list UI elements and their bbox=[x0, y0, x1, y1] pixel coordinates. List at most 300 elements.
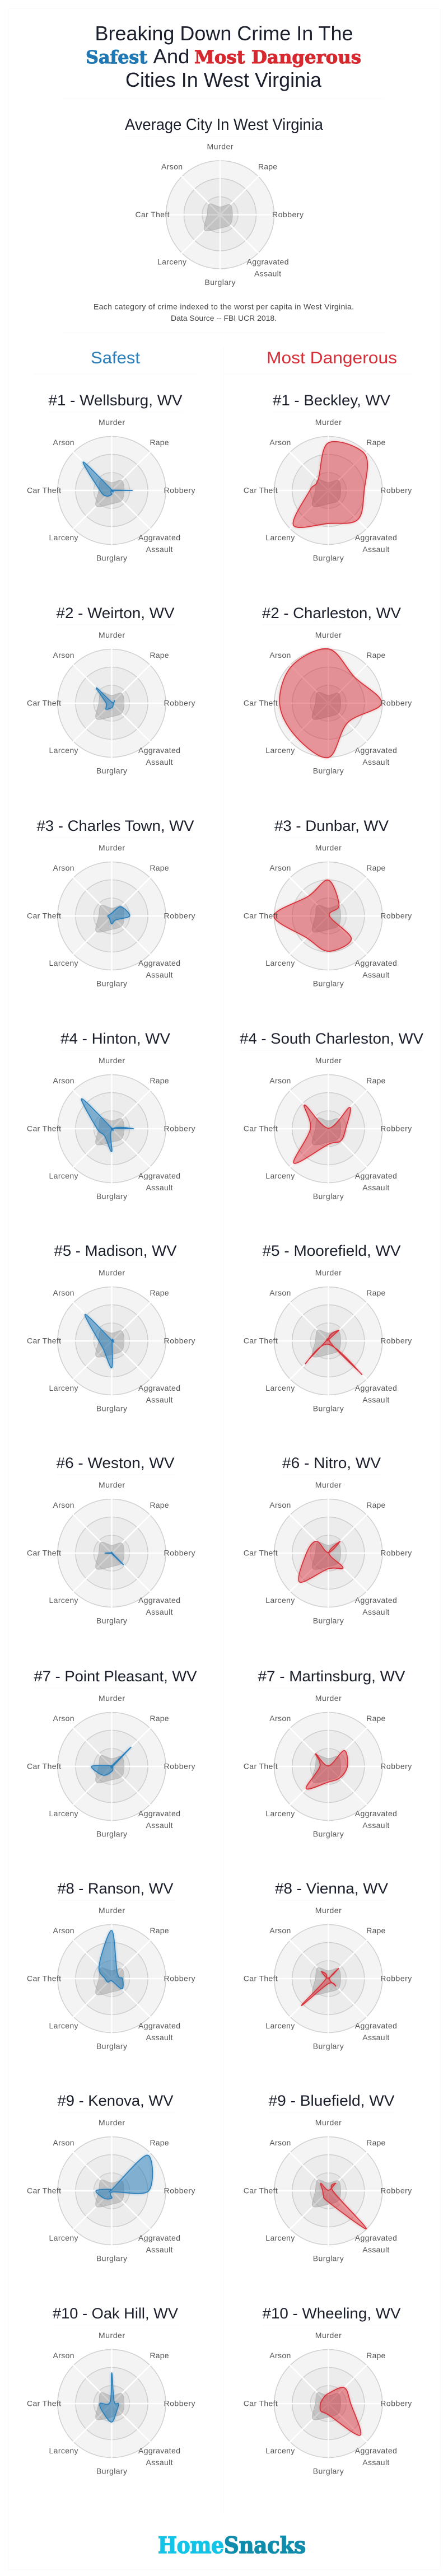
data shape bbox=[274, 880, 351, 951]
axis labels: Rape bbox=[150, 2138, 169, 2147]
heading: average city: Average City In West Virginia bbox=[125, 116, 324, 134]
axis labels: Arson bbox=[53, 863, 74, 872]
radar chart: Nitro bbox=[244, 1480, 412, 1625]
axis labels bbox=[244, 2331, 412, 2476]
axis labels: Rape bbox=[150, 863, 169, 872]
axis labels: Murder bbox=[315, 1480, 342, 1489]
axis labels: Car Theft bbox=[27, 1761, 61, 1770]
radar chart: Charleston bbox=[244, 630, 412, 775]
axis labels: Burglary bbox=[96, 1616, 127, 1625]
data shape bbox=[298, 1541, 343, 1582]
axis labels: Arson bbox=[53, 651, 74, 660]
axis labels: Assault bbox=[362, 1607, 389, 1616]
axis labels: Burglary bbox=[313, 2254, 344, 2263]
axis labels: Robbery bbox=[164, 1336, 195, 1345]
axis labels: Robbery bbox=[380, 1974, 412, 1983]
axis labels: Aggravated bbox=[355, 2021, 397, 2030]
axis labels: Aggravated bbox=[355, 746, 397, 755]
axis labels: Car Theft bbox=[244, 1761, 278, 1770]
axis labels: Larceny bbox=[49, 1596, 78, 1605]
data shape bbox=[279, 649, 381, 758]
axis labels: Car Theft bbox=[244, 699, 278, 708]
axis labels: Murder bbox=[315, 418, 342, 427]
radar grid bbox=[58, 1074, 167, 1184]
radar chart: Hinton bbox=[27, 1056, 195, 1200]
axis labels: Aggravated bbox=[138, 746, 180, 755]
axis labels: Robbery bbox=[380, 2399, 412, 2407]
axis labels: Arson bbox=[269, 2351, 291, 2360]
axis labels: Assault bbox=[362, 2458, 389, 2467]
heading: #4 South Charleston: #4 - South Charleston, WV bbox=[240, 1030, 423, 1047]
axis labels: Burglary bbox=[313, 979, 344, 988]
axis labels: Assault bbox=[362, 758, 389, 766]
axis labels bbox=[27, 1906, 195, 2050]
axis labels: Burglary bbox=[96, 2254, 127, 2263]
axis labels: Aggravated bbox=[246, 258, 289, 267]
axis labels: Murder bbox=[207, 142, 234, 151]
axis labels: Robbery bbox=[164, 699, 195, 708]
data shape bbox=[99, 1930, 123, 1989]
axis labels: Larceny bbox=[265, 1383, 295, 1392]
radar grid bbox=[274, 1924, 383, 2033]
axis labels: Aggravated bbox=[355, 533, 397, 542]
data shape bbox=[91, 1747, 131, 1775]
axis labels bbox=[27, 1056, 195, 1200]
axis labels: Murder bbox=[99, 418, 125, 427]
axis labels: Burglary bbox=[96, 2041, 127, 2050]
axis labels: Larceny bbox=[265, 1596, 295, 1605]
axis labels: Assault bbox=[362, 545, 389, 554]
axis labels: Assault bbox=[146, 1395, 173, 1404]
axis labels: Larceny bbox=[49, 2233, 78, 2242]
data shape bbox=[293, 1105, 351, 1163]
axis labels: Robbery bbox=[164, 1974, 195, 1983]
axis labels: Aggravated bbox=[138, 959, 180, 967]
heading: #10 Oak Hill: #10 - Oak Hill, WV bbox=[53, 2305, 178, 2322]
radar grid bbox=[58, 648, 167, 758]
axis labels: Arson bbox=[53, 1714, 74, 1723]
axis labels: Car Theft bbox=[244, 486, 278, 495]
axis labels: Murder bbox=[99, 630, 125, 639]
axis labels: Robbery bbox=[380, 1549, 412, 1558]
axis labels: Car Theft bbox=[27, 2399, 61, 2407]
axis labels: Arson bbox=[269, 1500, 291, 1509]
axis labels bbox=[27, 2118, 195, 2263]
radar chart: Charles Town bbox=[27, 843, 195, 988]
heading: #2 Charleston: #2 - Charleston, WV bbox=[262, 605, 401, 621]
axis labels: Aggravated bbox=[355, 1596, 397, 1605]
axis labels: Larceny bbox=[49, 1171, 78, 1180]
axis labels: Aggravated bbox=[355, 1171, 397, 1180]
axis labels bbox=[244, 843, 412, 988]
axis labels bbox=[27, 843, 195, 988]
data shape bbox=[306, 1751, 348, 1789]
radar chart: Dunbar bbox=[244, 843, 412, 988]
axis labels: Assault bbox=[362, 970, 389, 979]
axis labels: Robbery bbox=[164, 911, 195, 920]
axis labels: Murder bbox=[99, 1480, 125, 1489]
axis labels bbox=[244, 1694, 412, 1839]
radar grid bbox=[274, 2349, 383, 2458]
axis labels: Robbery bbox=[380, 1124, 412, 1133]
axis labels: Robbery bbox=[380, 911, 412, 920]
radar chart: Ranson bbox=[27, 1906, 195, 2050]
axis labels: Rape bbox=[366, 1714, 386, 1723]
title: And bbox=[153, 45, 189, 68]
radar grid bbox=[58, 1498, 167, 1608]
axis labels: Murder bbox=[99, 843, 125, 852]
axis labels: Robbery bbox=[164, 1761, 195, 1770]
axis labels: Burglary bbox=[313, 1830, 344, 1839]
axis labels: Arson bbox=[53, 2138, 74, 2147]
axis labels: Car Theft bbox=[27, 2186, 61, 2195]
radar grid bbox=[274, 1286, 383, 1396]
axis labels: Murder bbox=[99, 1268, 125, 1277]
axis labels: Assault bbox=[146, 545, 173, 554]
axis labels: Assault bbox=[254, 269, 281, 278]
axis labels: Assault bbox=[146, 2245, 173, 2254]
heading: #3 Charles Town: #3 - Charles Town, WV bbox=[37, 817, 194, 834]
radar grid bbox=[274, 436, 383, 545]
axis labels: Rape bbox=[366, 1500, 386, 1509]
axis labels: Murder bbox=[315, 843, 342, 852]
heading: #4 Hinton: #4 - Hinton, WV bbox=[60, 1030, 170, 1047]
data shape bbox=[96, 2155, 152, 2199]
axis labels: Arson bbox=[269, 1714, 291, 1723]
heading: #8 Vienna: #8 - Vienna, WV bbox=[275, 1880, 388, 1897]
axis labels: Arson bbox=[161, 162, 183, 171]
radar chart: South Charleston bbox=[244, 1056, 412, 1200]
axis labels: Murder bbox=[315, 2118, 342, 2127]
axis labels: Rape bbox=[366, 1926, 386, 1935]
axis labels bbox=[27, 2331, 195, 2476]
radar grid bbox=[274, 1712, 383, 1821]
axis labels bbox=[27, 1694, 195, 1839]
axis labels bbox=[244, 1056, 412, 1200]
heading: #9 Kenova: #9 - Kenova, WV bbox=[57, 2092, 174, 2109]
radar chart: Point Pleasant bbox=[27, 1694, 195, 1839]
axis labels bbox=[27, 630, 195, 775]
logo: HomeSnacks bbox=[158, 2532, 306, 2559]
axis labels: Aggravated bbox=[355, 959, 397, 967]
axis labels: Murder bbox=[315, 1694, 342, 1703]
title: Breaking Down Crime In The bbox=[95, 22, 353, 45]
radar chart: Wellsburg bbox=[27, 418, 195, 562]
axis labels: Aggravated bbox=[138, 2021, 180, 2030]
logo: HomeSnacks: Home bbox=[158, 2532, 224, 2559]
radar grid bbox=[58, 861, 167, 971]
axis labels: Burglary bbox=[313, 1191, 344, 1200]
heading: #8 Ranson: #8 - Ranson, WV bbox=[57, 1880, 174, 1897]
radar grid with average shape bbox=[166, 160, 275, 270]
axis labels: Aggravated bbox=[138, 2233, 180, 2242]
axis labels: Murder bbox=[99, 2118, 125, 2127]
axis labels: Larceny bbox=[49, 2021, 78, 2030]
axis labels: Arson bbox=[269, 1076, 291, 1085]
radar grid bbox=[58, 1712, 167, 1821]
axis labels: Aggravated bbox=[355, 1383, 397, 1392]
radar chart: Beckley bbox=[244, 418, 412, 562]
axis labels: Assault bbox=[146, 1183, 173, 1192]
axis labels: Arson bbox=[269, 651, 291, 660]
axis labels: Larceny bbox=[265, 2021, 295, 2030]
axis labels: Murder bbox=[99, 1906, 125, 1915]
axis labels: Robbery bbox=[164, 1124, 195, 1133]
axis labels: Car Theft bbox=[27, 1336, 61, 1345]
axis labels: Car Theft bbox=[244, 1336, 278, 1345]
data shape bbox=[105, 1552, 124, 1565]
data shape bbox=[85, 1315, 114, 1368]
axis labels: Larceny bbox=[49, 746, 78, 755]
axis labels: Car Theft bbox=[136, 210, 170, 219]
axis labels: Rape bbox=[150, 651, 169, 660]
axis labels bbox=[244, 1268, 412, 1413]
axis labels: Rape bbox=[366, 651, 386, 660]
title: Safest bbox=[86, 46, 147, 68]
axis labels: Larceny bbox=[265, 746, 295, 755]
radar grid bbox=[58, 1286, 167, 1396]
axis labels: Aggravated bbox=[355, 1809, 397, 1818]
axis labels: Rape bbox=[258, 162, 277, 171]
axis labels: Aggravated bbox=[138, 1171, 180, 1180]
axis labels: Robbery bbox=[272, 210, 304, 219]
axis labels: Aggravated bbox=[355, 2233, 397, 2242]
axis labels: Larceny bbox=[49, 959, 78, 967]
heading: #5 Madison: #5 - Madison, WV bbox=[54, 1242, 177, 1259]
radar grid bbox=[58, 2349, 167, 2458]
axis labels: Burglary bbox=[96, 1404, 127, 1413]
axis labels: Arson bbox=[53, 1288, 74, 1297]
axis labels: Larceny bbox=[49, 1383, 78, 1392]
heading: #6 Nitro: #6 - Nitro, WV bbox=[282, 1455, 381, 1471]
axis labels: Car Theft bbox=[27, 486, 61, 495]
axis labels: Car Theft bbox=[244, 2399, 278, 2407]
axis labels bbox=[244, 2118, 412, 2263]
axis labels: Arson bbox=[53, 1500, 74, 1509]
radar chart: Weston bbox=[27, 1480, 195, 1625]
radar grid bbox=[58, 1924, 167, 2033]
axis labels: Car Theft bbox=[244, 1549, 278, 1558]
axis labels: Larceny bbox=[265, 533, 295, 542]
axis labels: Burglary bbox=[313, 2467, 344, 2476]
axis labels: Larceny bbox=[49, 533, 78, 542]
axis labels: Rape bbox=[150, 2351, 169, 2360]
axis labels bbox=[27, 1480, 195, 1625]
axis labels: Burglary bbox=[313, 1404, 344, 1413]
axis labels: Car Theft bbox=[27, 699, 61, 708]
axis labels: Assault bbox=[146, 1607, 173, 1616]
radar chart: Oak Hill bbox=[27, 2331, 195, 2476]
data shape bbox=[321, 2184, 366, 2229]
axis labels: Car Theft bbox=[27, 1124, 61, 1133]
axis labels bbox=[27, 418, 195, 562]
heading: #3 Dunbar: #3 - Dunbar, WV bbox=[274, 817, 389, 834]
data shape bbox=[83, 462, 132, 496]
axis labels: Burglary bbox=[313, 2041, 344, 2050]
radar chart: Vienna bbox=[244, 1906, 412, 2050]
axis labels: Car Theft bbox=[244, 2186, 278, 2195]
axis labels: Murder bbox=[315, 2331, 342, 2340]
axis labels: Murder bbox=[99, 2331, 125, 2340]
axis labels: Burglary bbox=[313, 1616, 344, 1625]
axis labels: Larceny bbox=[265, 959, 295, 967]
note: data source: Each category of crime indexed to the worst per capita in West Virginia. bbox=[94, 302, 354, 311]
axis labels: Rape bbox=[150, 438, 169, 447]
axis labels: Aggravated bbox=[138, 533, 180, 542]
axis labels: Aggravated bbox=[138, 2446, 180, 2455]
heading: #1 Beckley: #1 - Beckley, WV bbox=[273, 392, 390, 409]
axis labels: Rape bbox=[150, 1288, 169, 1297]
axis labels: Rape bbox=[366, 2138, 386, 2147]
axis labels: Robbery bbox=[164, 486, 195, 495]
axis labels: Aggravated bbox=[355, 2446, 397, 2455]
axis labels bbox=[27, 1268, 195, 1413]
axis labels: Arson bbox=[269, 438, 291, 447]
axis labels: Arson bbox=[53, 1926, 74, 1935]
axis labels: Larceny bbox=[265, 2446, 295, 2455]
data shape bbox=[320, 2387, 361, 2435]
axis labels: Arson bbox=[53, 2351, 74, 2360]
radar chart: Weirton bbox=[27, 630, 195, 775]
radar chart: Kenova bbox=[27, 2118, 195, 2263]
axis labels: Robbery bbox=[380, 486, 412, 495]
axis labels: Car Theft bbox=[244, 911, 278, 920]
axis labels: Burglary bbox=[96, 1191, 127, 1200]
column heading: most dangerous: Most Dangerous bbox=[267, 349, 397, 367]
axis labels: Assault bbox=[146, 758, 173, 766]
axis labels: Rape bbox=[366, 2351, 386, 2360]
axis labels: Arson bbox=[269, 2138, 291, 2147]
axis labels: Larceny bbox=[265, 1171, 295, 1180]
axis labels: Robbery bbox=[164, 1549, 195, 1558]
axis labels: Car Theft bbox=[244, 1974, 278, 1983]
axis labels: Car Theft bbox=[27, 1549, 61, 1558]
data shape bbox=[100, 2373, 119, 2422]
axis labels bbox=[136, 142, 304, 287]
radar grid bbox=[274, 1498, 383, 1608]
axis labels: Burglary bbox=[96, 553, 127, 562]
axis labels: Assault bbox=[146, 2458, 173, 2467]
radar grid bbox=[274, 2136, 383, 2246]
axis labels: Robbery bbox=[164, 2399, 195, 2407]
data shape bbox=[301, 1969, 339, 2005]
radar chart: Bluefield bbox=[244, 2118, 412, 2263]
heading: #5 Moorefield: #5 - Moorefield, WV bbox=[263, 1242, 400, 1259]
logo: HomeSnacks: Snacks bbox=[224, 2532, 306, 2559]
axis labels: Rape bbox=[150, 1926, 169, 1935]
axis labels: Murder bbox=[315, 1268, 342, 1277]
axis labels: Murder bbox=[99, 1056, 125, 1065]
radar grid bbox=[58, 436, 167, 545]
data shape bbox=[96, 688, 114, 709]
data shape bbox=[293, 442, 367, 527]
axis labels: Assault bbox=[362, 1821, 389, 1830]
axis labels: Murder bbox=[315, 630, 342, 639]
radar grid bbox=[274, 1074, 383, 1184]
data shape bbox=[81, 1098, 133, 1152]
radar grid bbox=[274, 861, 383, 971]
heading: #2 Weirton: #2 - Weirton, WV bbox=[56, 605, 175, 621]
axis labels: Assault bbox=[146, 1821, 173, 1830]
axis labels: Murder bbox=[99, 1694, 125, 1703]
axis labels: Burglary bbox=[313, 553, 344, 562]
axis labels: Rape bbox=[150, 1076, 169, 1085]
axis labels: Rape bbox=[366, 1288, 386, 1297]
axis labels: Assault bbox=[362, 2245, 389, 2254]
axis labels: Burglary bbox=[96, 766, 127, 775]
axis labels: Larceny bbox=[157, 258, 186, 267]
heading: #1 Wellsburg: #1 - Wellsburg, WV bbox=[49, 392, 182, 409]
radar chart: Wheeling bbox=[244, 2331, 412, 2476]
column heading: safest: Safest bbox=[91, 349, 141, 367]
axis labels: Arson bbox=[53, 438, 74, 447]
radar chart: average city bbox=[136, 142, 304, 287]
axis labels: Aggravated bbox=[138, 1383, 180, 1392]
axis labels: Robbery bbox=[380, 2186, 412, 2195]
radar grid bbox=[58, 2136, 167, 2246]
axis labels: Burglary bbox=[96, 2467, 127, 2476]
data shape bbox=[305, 1330, 362, 1375]
axis labels: Arson bbox=[53, 1076, 74, 1085]
data shape bbox=[108, 907, 130, 924]
axis labels bbox=[244, 418, 412, 562]
axis labels: Larceny bbox=[265, 1809, 295, 1818]
title bbox=[86, 22, 361, 91]
radar chart: Madison bbox=[27, 1268, 195, 1413]
axis labels bbox=[244, 630, 412, 775]
heading: #7 Martinsburg: #7 - Martinsburg, WV bbox=[258, 1668, 405, 1685]
axis labels: Robbery bbox=[164, 2186, 195, 2195]
axis labels: Larceny bbox=[49, 2446, 78, 2455]
axis labels: Car Theft bbox=[27, 1974, 61, 1983]
axis labels: Aggravated bbox=[138, 1596, 180, 1605]
axis labels: Arson bbox=[269, 1288, 291, 1297]
axis labels: Assault bbox=[362, 1183, 389, 1192]
axis labels: Aggravated bbox=[138, 1809, 180, 1818]
axis labels: Assault bbox=[362, 2033, 389, 2042]
axis labels: Burglary bbox=[313, 766, 344, 775]
axis labels: Burglary bbox=[96, 1830, 127, 1839]
axis labels: Car Theft bbox=[244, 1124, 278, 1133]
axis labels: Assault bbox=[146, 2033, 173, 2042]
axis labels: Rape bbox=[150, 1714, 169, 1723]
heading: #7 Point Pleasant: #7 - Point Pleasant, WV bbox=[34, 1668, 197, 1685]
axis labels: Car Theft bbox=[27, 911, 61, 920]
axis labels: Arson bbox=[269, 863, 291, 872]
axis labels: Larceny bbox=[49, 1809, 78, 1818]
heading: #9 Bluefield: #9 - Bluefield, WV bbox=[269, 2092, 394, 2109]
axis labels: Robbery bbox=[380, 699, 412, 708]
title: Cities In West Virginia bbox=[125, 68, 322, 91]
radar grid bbox=[274, 648, 383, 758]
axis labels: Arson bbox=[269, 1926, 291, 1935]
heading: #6 Weston: #6 - Weston, WV bbox=[56, 1455, 175, 1471]
radar chart: Moorefield bbox=[244, 1268, 412, 1413]
axis labels: Rape bbox=[366, 438, 386, 447]
axis labels: Burglary bbox=[96, 979, 127, 988]
radar chart: Martinsburg bbox=[244, 1694, 412, 1839]
axis labels: Rape bbox=[150, 1500, 169, 1509]
axis labels: Burglary bbox=[205, 278, 235, 287]
axis labels: Murder bbox=[315, 1906, 342, 1915]
axis labels: Murder bbox=[315, 1056, 342, 1065]
axis labels: Larceny bbox=[265, 2233, 295, 2242]
axis labels: Robbery bbox=[380, 1761, 412, 1770]
axis labels bbox=[244, 1906, 412, 2050]
axis labels: Rape bbox=[366, 863, 386, 872]
title: Most Dangerous bbox=[194, 46, 361, 68]
axis labels: Assault bbox=[146, 970, 173, 979]
